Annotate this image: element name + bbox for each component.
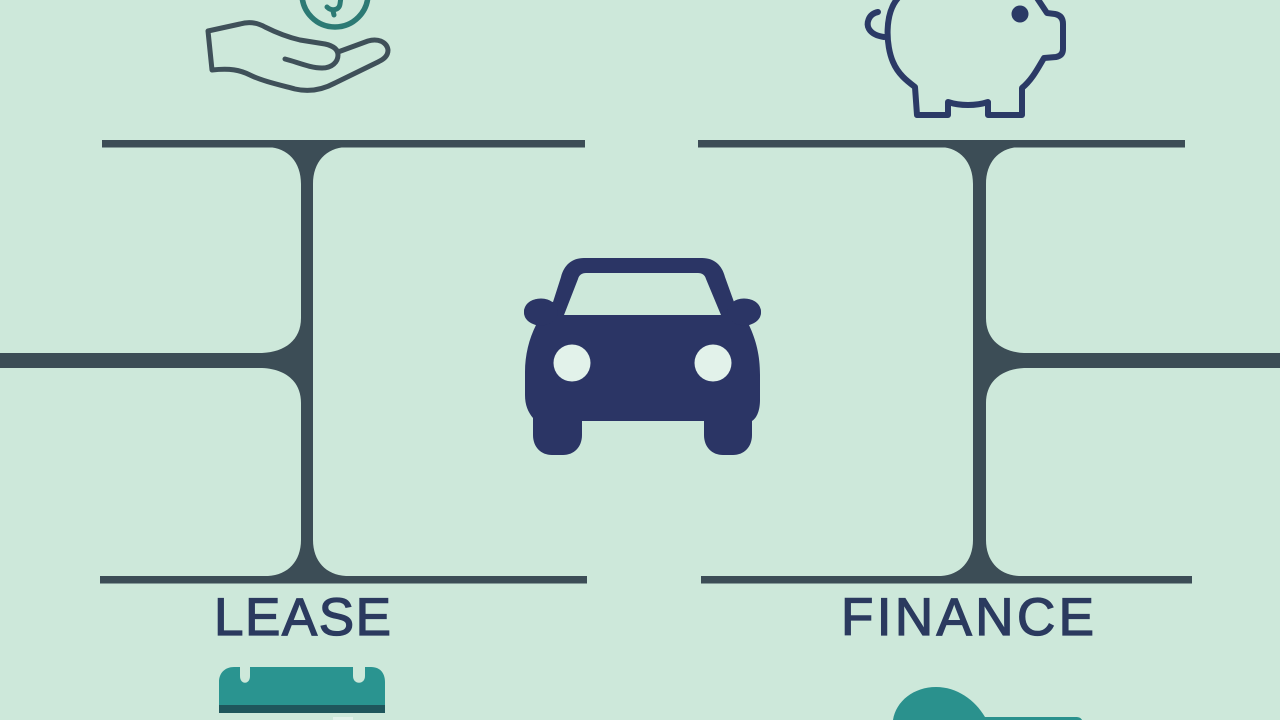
pig eye: [1012, 6, 1028, 22]
icon: car front view: [524, 258, 761, 455]
icon: hand holding coin: [208, 0, 388, 90]
label: finance: FINANCE: [841, 588, 1094, 647]
icon: dollar coin: [302, 0, 368, 27]
lease connector frame: [0, 140, 587, 584]
pig body: [888, 0, 1063, 115]
icon: open hand: [208, 23, 388, 90]
icon: calendar: [219, 667, 385, 720]
finance connector frame: [698, 140, 1280, 584]
calendar band: [219, 705, 385, 713]
icon: key: [893, 687, 1082, 720]
icon: piggy bank: [868, 0, 1063, 115]
left mirror: [524, 298, 558, 326]
label: lease: LEASE: [214, 588, 391, 647]
right mirror: [727, 298, 761, 326]
calendar date mark: [333, 717, 353, 720]
pig tail: [868, 12, 884, 37]
left headlight: [554, 344, 590, 382]
right headlight: [694, 344, 732, 382]
